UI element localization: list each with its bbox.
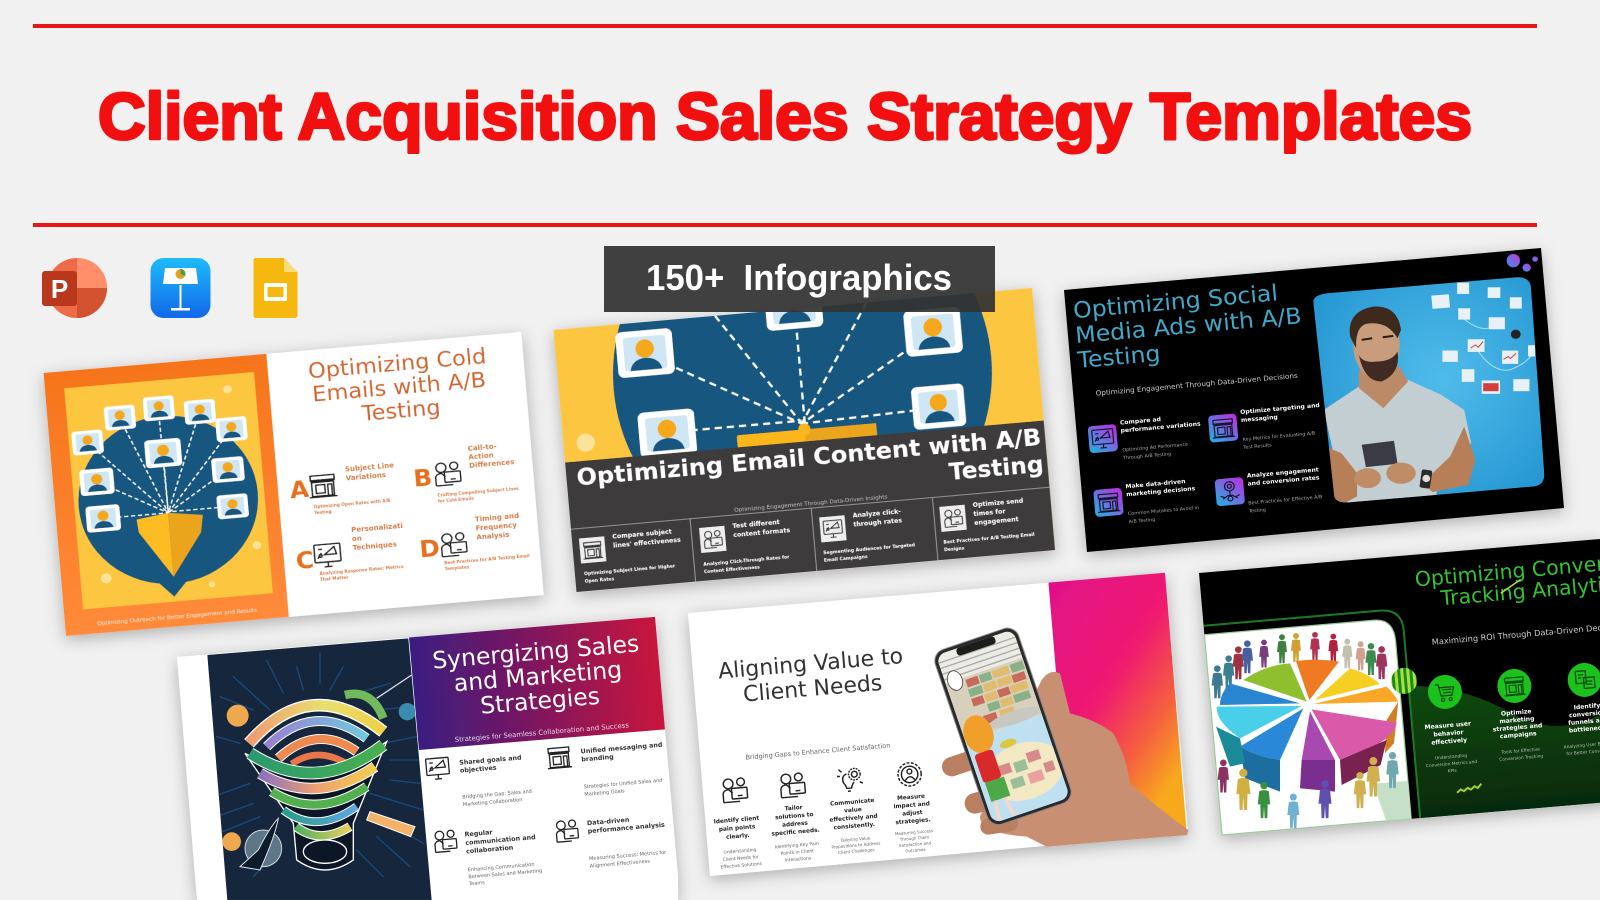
item C xyxy=(293,522,407,584)
item: data-driven analysis: performance analysis xyxy=(587,821,665,835)
slide title: Emails with A/B xyxy=(311,368,487,407)
item B: Crafting Compelling Subject Lines xyxy=(437,486,519,498)
accent circle xyxy=(1390,667,1418,695)
item: analyze engagement: Best Practices for Effective A/B xyxy=(1248,494,1323,507)
column: tailor solutions: solutions to xyxy=(775,812,814,821)
item: shared goals: Marketing Collaboration xyxy=(463,797,523,808)
illustration: funnel fan of contacts xyxy=(68,384,266,604)
column: measure impact xyxy=(889,761,935,854)
column: communicate value: Communicate xyxy=(830,798,875,808)
column: tailor solutions: specific needs. xyxy=(771,828,820,838)
cell: optimize send times: Designs xyxy=(944,545,965,553)
column: measure behaviour: Measure user xyxy=(1424,720,1471,731)
item: regular communication: communication and xyxy=(465,833,536,847)
item C: C xyxy=(295,546,315,575)
column: identify pain points xyxy=(710,777,763,871)
cell: test content formats: content formats xyxy=(733,527,791,539)
icon: Google Slides xyxy=(254,258,298,318)
cell: optimize send times xyxy=(939,497,1036,553)
item B: Call-to- xyxy=(467,443,497,453)
item D: Best Practices for A/B Testing Email xyxy=(444,553,530,565)
panel: Optimizing Email Content slide: Testing xyxy=(948,452,1045,486)
cell: optimize send times: times for xyxy=(973,508,1007,518)
column: identify pain points: Effective Solutions xyxy=(720,861,763,870)
item D: Frequency xyxy=(475,521,518,533)
cell: test content formats: Analyzing Click-Through Rates for xyxy=(703,554,790,568)
item C: That Matter xyxy=(320,575,350,582)
item: regular communication: collaboration xyxy=(466,843,514,855)
column: identify pain points: Identify client xyxy=(714,816,760,825)
column: measure impact: adjust xyxy=(902,810,923,818)
column: optimize marketing: Optimize xyxy=(1501,708,1532,718)
item: regular communication: Teams xyxy=(468,880,485,887)
item D: Templates xyxy=(445,564,470,571)
column: measure behaviour: KPIs xyxy=(1447,768,1458,774)
slide subtitle: Strategies for Seamless Collaboration and Success xyxy=(454,721,630,744)
item: data-driven analysis xyxy=(555,812,668,872)
column: communicate value: consistently. xyxy=(833,822,875,831)
slide subtitle: Optimizing Engagement Through Data-Driven Insights xyxy=(734,494,888,514)
illustration: contacts on blue circle xyxy=(576,293,992,457)
column: measure impact: Measure xyxy=(897,794,925,802)
item C: Personalizati xyxy=(351,522,403,534)
cell: analyze click-through: Email Campaigns xyxy=(824,554,868,564)
slide title: Strategies xyxy=(479,682,601,720)
item: data-driven decisions: Make data-driven xyxy=(1125,478,1186,490)
icon: PowerPoint: P xyxy=(51,274,68,304)
item A: Testing xyxy=(314,509,332,515)
header band and text xyxy=(409,617,677,891)
accent squiggle xyxy=(1456,784,1482,793)
item: regular communication: Between Sales and Marketing xyxy=(468,868,542,880)
column: tailor solutions xyxy=(767,772,822,865)
decorative dots xyxy=(1507,254,1538,272)
badge: 150+ Infographics xyxy=(604,246,995,312)
cell: optimize send times: Optimize send xyxy=(972,498,1024,509)
cell: analyze click-through xyxy=(819,507,916,564)
column: identify funnels: Identify xyxy=(1573,702,1600,711)
top red rule xyxy=(33,24,1537,28)
cell: compare subject lines xyxy=(579,528,684,585)
column: communicate value xyxy=(825,767,881,856)
item: unified messaging: Marketing Goals xyxy=(584,788,625,798)
cell: compare subject lines: Open Rates xyxy=(585,576,615,585)
item C: Analyzing Response Rates: Metrics xyxy=(319,564,404,576)
panel: Synergizing Sales and Marketing slide xyxy=(177,617,678,900)
item C: on xyxy=(352,535,362,543)
slide title: Aligning Value to xyxy=(717,644,904,685)
slide text and icons xyxy=(696,573,1187,873)
column: communicate value: Tailoring Value xyxy=(839,835,871,843)
column: identify pain points: Understanding xyxy=(723,847,757,856)
item: unified messaging: Unified messaging and xyxy=(580,741,663,756)
column: identify pain points: clearly. xyxy=(726,833,750,841)
column: tailor solutions: Interactions xyxy=(784,855,812,864)
cell: analyze click-through: Segmenting Audiences for Targeted xyxy=(823,542,915,556)
item: analyze engagement: Analyze engagement xyxy=(1247,466,1319,480)
column: tailor solutions: Tailor xyxy=(784,805,803,812)
column: measure behaviour xyxy=(1418,673,1478,776)
column: optimize marketing: strategies and xyxy=(1493,722,1543,733)
item: compare ad: performance variations xyxy=(1120,421,1201,434)
column: measure impact: Through Client xyxy=(899,834,930,842)
item A: Subject Line xyxy=(345,462,395,473)
item D: D xyxy=(418,535,441,563)
panel: Optimizing Email Content slide xyxy=(546,284,1063,604)
item: optimize targeting: Key Metrics for Evaluating A/B xyxy=(1242,431,1315,443)
item: compare ad xyxy=(1087,413,1204,464)
cell: compare subject lines: Compare subject xyxy=(612,528,672,541)
column: optimize marketing: marketing xyxy=(1499,715,1535,725)
column: measure impact: Satisfaction and xyxy=(899,840,932,848)
item: data-driven analysis: Data-driven xyxy=(587,816,630,827)
cell: test content formats: Test different xyxy=(732,519,780,530)
slide title: and Marketing xyxy=(453,655,623,697)
item: regular communication: Enhancing Communication xyxy=(468,862,535,873)
slide footer: Optimizing Outreach for Better Engagement and Results xyxy=(97,608,257,627)
item: regular communication: Regular xyxy=(464,828,494,839)
item: shared goals: Shared goals and xyxy=(459,753,522,767)
item B: for Cold Emails xyxy=(438,496,475,504)
item A: Variations xyxy=(345,471,386,482)
slide title: Testing xyxy=(360,396,442,427)
item: optimize targeting: Test Results xyxy=(1242,442,1272,451)
column: measure impact: strategies. xyxy=(895,817,931,826)
column: measure behaviour: effectively xyxy=(1431,737,1467,747)
slide text and items xyxy=(1071,278,1329,528)
item: shared goals: Bridging the Gap: Sales and xyxy=(462,789,532,801)
item: unified messaging xyxy=(546,739,667,801)
column: measure impact: Outcomes xyxy=(905,847,926,853)
item: compare ad: Optimizing Ad Performance xyxy=(1122,442,1188,453)
column: optimize marketing: campaigns xyxy=(1500,730,1537,740)
title: Client Acquisition Sales Strategy Templates xyxy=(98,79,1472,153)
item A: A xyxy=(289,475,311,504)
item: data-driven analysis: Measuring Success: Metrics for xyxy=(589,850,667,862)
item: compare ad: Through A/B Testing xyxy=(1122,451,1171,461)
column: measure behaviour: Understanding xyxy=(1435,753,1467,762)
icon: PowerPoint xyxy=(42,258,107,318)
badge: 150+ Infographics: 150+ Infographics xyxy=(646,257,952,298)
column: tailor solutions: Identifying Key Pain xyxy=(774,841,819,850)
item: analyze engagement: Testing xyxy=(1248,507,1266,515)
item A xyxy=(288,462,398,517)
cell: analyze click-through: through rates xyxy=(853,517,903,529)
column: tailor solutions: Points in Client xyxy=(780,848,814,857)
item B: Action xyxy=(468,451,494,461)
item: data-driven decisions: Common Mistakes to Avoid in xyxy=(1128,505,1199,517)
icon: Keynote xyxy=(150,258,210,318)
cell: optimize send times: engagement xyxy=(974,516,1019,527)
slide content xyxy=(1200,548,1600,835)
item: regular communication xyxy=(434,823,543,890)
cell: compare subject lines: Optimizing Subject Lines for Higher xyxy=(584,563,676,577)
column: measure behaviour: behavior xyxy=(1433,729,1464,739)
panel: Aligning Value to Client Needs slide xyxy=(688,573,1188,876)
item D: Analysis xyxy=(476,531,510,541)
illustration: hand holding phone xyxy=(932,624,1188,847)
item: shared goals: objectives xyxy=(460,764,497,775)
photo: man holding tablet xyxy=(1310,273,1548,506)
item B: B xyxy=(412,464,433,492)
column: optimize marketing xyxy=(1488,667,1545,763)
slide title: Testing xyxy=(1076,341,1161,374)
item: data-driven decisions xyxy=(1093,477,1200,528)
item: shared goals xyxy=(426,751,533,811)
item: unified messaging: branding xyxy=(581,753,614,763)
item: analyze engagement: and conversion rates xyxy=(1247,474,1320,488)
item: analyze engagement xyxy=(1214,466,1323,517)
item D: Timing and xyxy=(475,512,520,524)
panel: Optimizing Social Media Ads slide xyxy=(1064,248,1564,552)
column: measure impact: Measuring Success xyxy=(895,828,933,836)
slide subtitle: Bridging Gaps to Enhance Client Satisfaction xyxy=(745,741,891,762)
item: compare ad: Compare ad xyxy=(1120,416,1161,427)
panel: Optimizing Cold Emails slide xyxy=(44,332,544,636)
item: optimize targeting: Optimize targeting and xyxy=(1240,402,1320,416)
column: communicate value: Propositions to Address xyxy=(831,841,880,850)
phone xyxy=(932,624,1076,828)
item B: Differences xyxy=(469,458,515,470)
column: communicate value: effectively and xyxy=(829,814,878,824)
item: optimize targeting: messaging xyxy=(1241,414,1278,424)
cell: analyze click-through: Analyze click- xyxy=(852,508,902,520)
column: measure impact: impact and xyxy=(893,801,930,810)
slide title: Optimizing Social xyxy=(1072,281,1279,324)
cell: test content formats xyxy=(699,518,794,575)
column: optimize marketing: Tools for Effective xyxy=(1500,747,1540,756)
column: communicate value: value xyxy=(844,807,862,814)
item: unified messaging: Strategies for Unified Sales and xyxy=(584,778,663,790)
lower red rule xyxy=(33,223,1537,227)
slide title: Synergizing Sales xyxy=(431,629,640,675)
item: data-driven decisions: A/B Testing xyxy=(1128,517,1156,525)
item: optimize targeting xyxy=(1208,402,1323,454)
slide subtitle: Optimizing Engagement Through Data-Driven Decisions xyxy=(1095,371,1298,398)
cell: compare subject lines: lines' effectiveness xyxy=(613,537,681,550)
cell: optimize send times: Best Practices for A/B Testing Email xyxy=(943,532,1035,546)
cell: test content formats: Content Effectiveness xyxy=(704,564,760,575)
column: tailor solutions: address xyxy=(782,821,809,829)
column: identify pain points: Client Needs for xyxy=(722,854,759,863)
item: data-driven decisions: marketing decisions xyxy=(1126,485,1196,498)
column: identify funnels xyxy=(1556,661,1600,757)
slide title: Optimizing Cold xyxy=(307,345,487,384)
photo: 3D pie chart with figures xyxy=(1212,632,1399,828)
item A: Optimizing Open Rates with A/B xyxy=(314,498,391,509)
slide title: Client Needs xyxy=(742,671,883,708)
item B xyxy=(411,441,520,506)
panel: Optimizing Conversion Tracking Analytics slide xyxy=(1199,539,1600,835)
column: communicate value: Client Challenges xyxy=(838,847,875,855)
illustration: colourful funnel xyxy=(203,630,437,900)
item D xyxy=(417,511,531,573)
slide title: Optimizing Email Content with A/B xyxy=(576,425,1042,491)
item C: Techniques xyxy=(352,541,397,552)
column: optimize marketing: Conversion Tracking xyxy=(1499,753,1544,763)
item: data-driven analysis: Alignment Effectiveness xyxy=(590,859,651,870)
slide title: Media Ads with A/B xyxy=(1074,304,1302,349)
column: identify pain points: pain points xyxy=(719,824,756,833)
column: measure behaviour: Conversion Metrics and xyxy=(1426,759,1478,769)
